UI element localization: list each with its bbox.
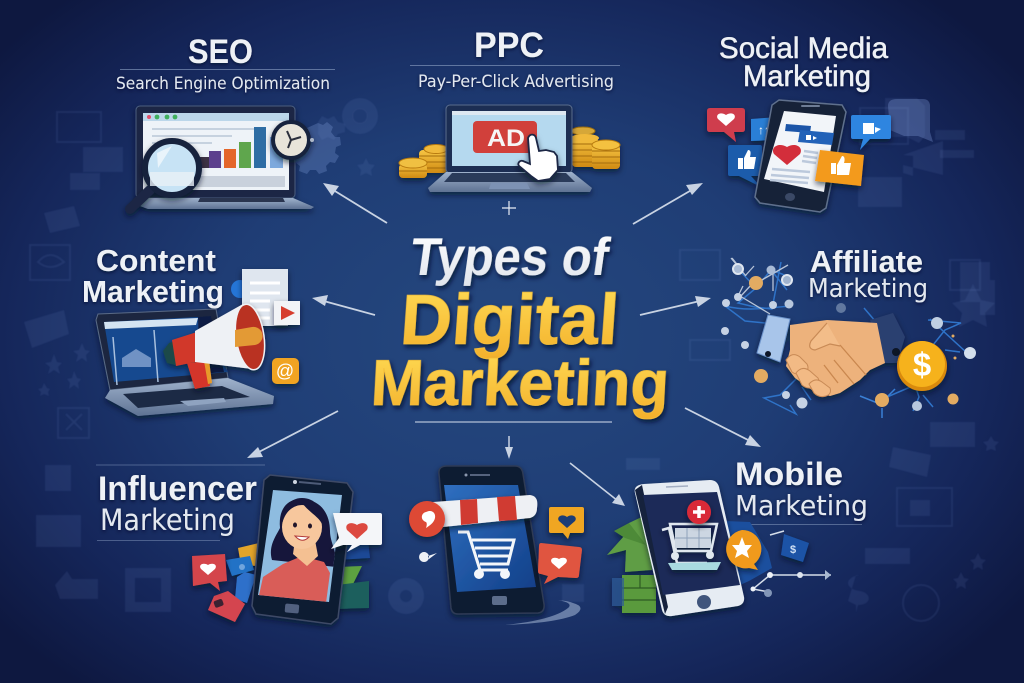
icon: red plus badge	[687, 500, 711, 524]
network lines	[725, 262, 966, 418]
arrow: to Social Media	[633, 183, 703, 224]
icon: social blocks behind phone	[208, 540, 370, 622]
title: Digital	[398, 281, 621, 360]
icon: red circle bubble	[409, 501, 445, 537]
icon: blue dot	[231, 280, 249, 298]
arrow: to Affiliate	[640, 296, 711, 315]
icon: coin stacks right	[571, 127, 620, 169]
icon: orange thumbs-up bubble	[815, 150, 864, 186]
arrow: to Content	[312, 295, 375, 315]
icon: coin stacks left	[399, 144, 448, 178]
icon: green tree and boxes	[607, 515, 656, 613]
icon: laptop with AD button: AD	[487, 125, 525, 152]
icon: smartphone	[635, 480, 744, 616]
arrow: down to shop phone	[505, 436, 513, 459]
panel: SEO	[116, 33, 341, 209]
heading: Content Marketing	[82, 243, 224, 309]
arrow: to Influencer	[247, 411, 338, 458]
heading: PPC: PPC	[474, 26, 544, 65]
icon: network nodes	[721, 264, 976, 411]
arrow: diagonal to mobile phone	[570, 463, 625, 506]
heading: Affiliate Marketing: Marketing	[808, 274, 928, 304]
icon: shopping cart	[458, 532, 514, 579]
icon: laptop	[96, 309, 274, 416]
panel: Content Marketing	[82, 243, 300, 416]
icon: hand cursor	[518, 135, 558, 181]
heading: Social Media Marketing: Social Media	[719, 32, 888, 65]
icon: dollar coin	[897, 341, 947, 391]
icon: cart on phone	[662, 524, 721, 570]
icon: red heart bubble	[538, 543, 582, 584]
panel: Affiliate Marketing	[721, 244, 976, 418]
title: Marketing	[369, 346, 671, 419]
heading: Influencer Marketing: Influencer	[98, 470, 257, 508]
title: Types of	[406, 228, 613, 287]
heading: Influencer Marketing	[98, 470, 257, 537]
icon: red heart bubble	[192, 554, 227, 591]
panel: Social Media Marketing	[707, 32, 933, 212]
sparkle	[502, 201, 516, 215]
icon: red heart bubble	[707, 108, 745, 142]
icon: dollar coin: $	[913, 346, 931, 383]
icon: clock	[273, 122, 314, 158]
title	[369, 228, 671, 419]
network line	[750, 531, 831, 597]
icon: blue tag: $	[790, 544, 796, 556]
heading: Social Media Marketing	[719, 32, 888, 93]
icon: video card	[274, 301, 300, 325]
heading: Content Marketing: Marketing	[82, 274, 224, 309]
subheading: PPC: Pay-Per-Click Advertising	[418, 72, 614, 92]
heading: Social Media Marketing: Marketing	[743, 60, 871, 93]
icon: laptop	[136, 106, 314, 209]
icon: blue video bubble	[851, 115, 891, 150]
icon: blue bubble	[751, 117, 778, 141]
icon: handshake	[757, 313, 905, 397]
heading: Mobile Marketing	[735, 456, 868, 522]
icon: at-sign badge: @	[276, 361, 294, 381]
arrow: to SEO	[323, 183, 387, 223]
icon: smartphone	[755, 100, 846, 212]
icon: smartphone with influencer	[252, 475, 353, 624]
panel: PPC	[399, 26, 620, 192]
icon: smartphone	[439, 466, 544, 614]
icon: ghost speech bubble	[887, 99, 933, 142]
panel: Mobile Marketing	[607, 456, 868, 616]
icon: megaphone	[163, 302, 268, 389]
heading: Mobile Marketing: Marketing	[735, 489, 868, 522]
decorative swoosh	[505, 600, 581, 625]
panel: shopping phone	[409, 466, 584, 625]
icon: striped awning	[433, 495, 537, 527]
icon: white heart speech bubble	[331, 513, 382, 552]
faint background icons	[24, 98, 999, 621]
heading: Affiliate Marketing: Affiliate	[810, 244, 923, 279]
heading: Mobile Marketing: Mobile	[735, 456, 843, 492]
icon: blue tag	[781, 534, 809, 562]
panel: Influencer Marketing	[96, 465, 382, 624]
heading: Affiliate Marketing	[808, 244, 928, 304]
icon: orange heart bubble	[549, 507, 584, 539]
title underline	[415, 421, 612, 423]
icon: document	[242, 269, 288, 326]
heading: Content Marketing: Content	[96, 243, 216, 278]
icon: laptop with AD button	[428, 105, 592, 192]
subheading: SEO: Search Engine Optimization	[116, 74, 330, 94]
icon: blue thumbs-up bubble	[728, 145, 762, 187]
arrow: to Mobile	[685, 408, 761, 447]
icon: at-sign badge	[272, 358, 299, 384]
icon: small white dot	[419, 552, 437, 562]
heading: SEO: SEO	[188, 33, 253, 71]
icon: magnifier	[130, 141, 199, 209]
icon: blue bubble: ↑↑	[758, 123, 770, 137]
icon: orange star bubble	[726, 530, 761, 570]
heading: Influencer Marketing: Marketing	[100, 503, 235, 537]
gears	[296, 122, 341, 174]
icon: blue document behind phone	[725, 521, 772, 585]
